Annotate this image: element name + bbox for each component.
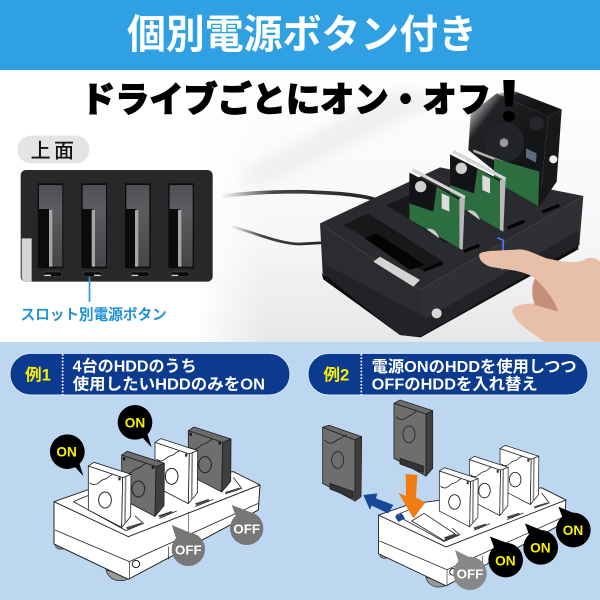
callout: ON: ON xyxy=(563,523,583,538)
subtitle: ドライブごとにオン・オフ xyxy=(81,80,491,120)
callout: ON xyxy=(523,523,558,565)
pointer line xyxy=(89,277,90,302)
example 1 heading xyxy=(10,353,290,395)
panel: example 1 xyxy=(10,353,290,581)
arrow: remove xyxy=(363,493,405,522)
illustration: dock with four drives xyxy=(54,427,260,581)
subtitle: ！ xyxy=(480,73,538,134)
3.5 inch drive xyxy=(468,91,562,207)
label: top face xyxy=(17,136,89,163)
callout: ON: ON xyxy=(495,553,516,568)
callout: OFF xyxy=(172,525,205,566)
photo backdrop xyxy=(195,70,600,342)
callout: OFF: OFF xyxy=(175,542,202,557)
callout: ON xyxy=(488,537,523,577)
example 2 heading xyxy=(308,353,588,395)
cables xyxy=(220,192,375,244)
inserted drive xyxy=(394,400,433,476)
top view of dock xyxy=(21,170,213,282)
2.5 inch front drive xyxy=(409,168,466,250)
title: 個別電源ボタン付き xyxy=(127,13,477,57)
example 1 heading: 4台のHDDのうち xyxy=(73,357,197,376)
header band xyxy=(0,0,600,70)
photo: drive dock with hand xyxy=(220,91,600,342)
example 2 heading: OFFのHDDを入れ替え xyxy=(372,376,538,394)
illustration: dock with three drives xyxy=(378,445,566,587)
subtitle xyxy=(81,73,538,134)
hand pressing button xyxy=(479,249,600,342)
callout: ON: ON xyxy=(56,445,77,460)
callout: OFF xyxy=(453,550,487,590)
dock body xyxy=(320,167,583,337)
callout: ON xyxy=(118,405,152,447)
label: slot power button: スロット別電源ボタン xyxy=(21,306,167,323)
callout: ON xyxy=(50,434,85,476)
arrow: insert xyxy=(398,474,425,518)
2.5 inch rear drive xyxy=(450,150,506,232)
callout: OFF xyxy=(230,505,263,545)
panel: examples background xyxy=(0,342,600,600)
callout: ON: ON xyxy=(530,541,551,556)
example 1 heading: 例1 xyxy=(25,366,51,385)
label: top face: 上面 xyxy=(31,139,77,162)
callout: OFF: OFF xyxy=(233,521,260,536)
example 1 heading: 使用したいHDDのみをON xyxy=(73,375,265,393)
example 2 heading: 電源ONのHDDを使用しつつ xyxy=(372,358,577,376)
panel: top view xyxy=(17,136,213,323)
callout: ON xyxy=(556,507,591,547)
removed drive xyxy=(323,425,362,501)
example 2 heading: 例2 xyxy=(323,366,349,385)
panel: example 2 xyxy=(308,353,591,590)
callout: OFF: OFF xyxy=(457,567,483,582)
callout: ON: ON xyxy=(125,416,145,431)
